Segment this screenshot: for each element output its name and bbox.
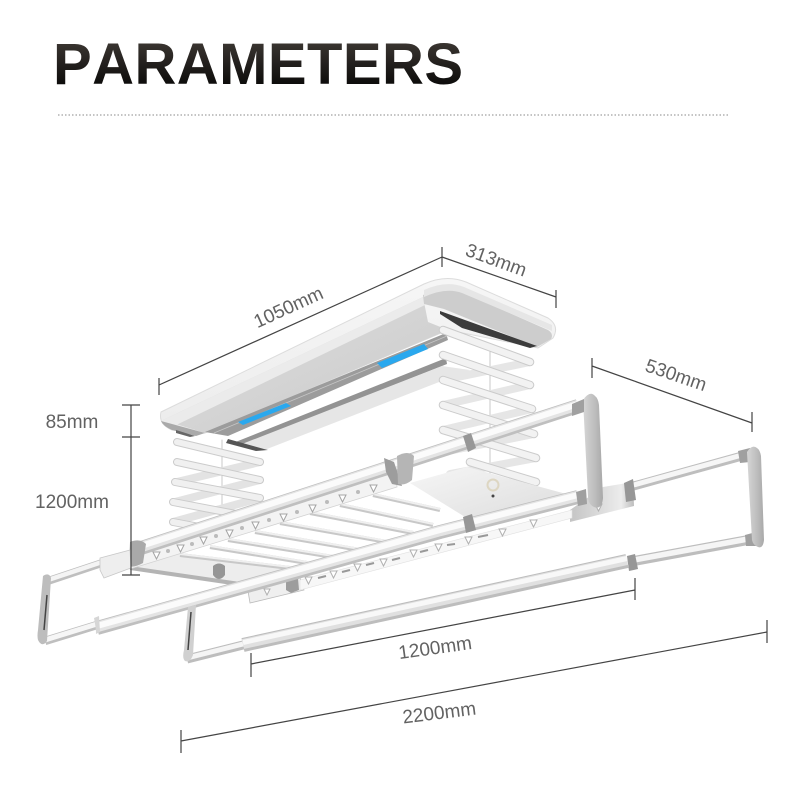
- dimension: 1050mm: 1050mm: [251, 283, 327, 333]
- rod bands: [627, 554, 638, 571]
- blue light left: [238, 403, 291, 425]
- rod band: [463, 433, 476, 452]
- right joints: [738, 448, 750, 463]
- lower-left handle: [183, 605, 196, 661]
- handle: [583, 394, 603, 508]
- ribbed strip 1: [205, 333, 448, 436]
- right joint: [576, 489, 587, 506]
- housing underside face: [163, 297, 448, 433]
- left tray plate: [130, 553, 290, 584]
- rack slats: [180, 495, 440, 568]
- dimension: 85mm and 1200mm height: [35, 405, 140, 575]
- dimension: 313mm: [442, 240, 556, 308]
- front perforated rail: [130, 462, 397, 569]
- dimension: 1050mm: [159, 247, 442, 395]
- hook bracket: [384, 458, 402, 486]
- front rod with right handle: [183, 447, 764, 661]
- title: PARAMETERS: [53, 32, 463, 97]
- blue light right: [377, 344, 428, 368]
- housing rim: [160, 278, 556, 433]
- left handle: [38, 574, 51, 644]
- right end block: [570, 482, 634, 522]
- right handle: [747, 447, 764, 547]
- lower perforated rail: [248, 482, 634, 603]
- drying tray with slats: [130, 467, 570, 585]
- dimension: 2200mm: [181, 620, 767, 753]
- rod band: [463, 514, 476, 533]
- left bracket: [129, 540, 146, 567]
- dimension: 530mm: 530mm: [642, 356, 709, 396]
- rear rod with grey handle: [129, 394, 603, 567]
- dimension: 530mm: [592, 356, 752, 432]
- inner panel: [242, 366, 470, 449]
- dimension: 1200mm width: 1200mm: [397, 633, 473, 664]
- clamp knob: [213, 564, 225, 579]
- end cap: [423, 290, 552, 347]
- top housing with blue lights: [160, 278, 556, 451]
- scissor lift: right: [443, 330, 536, 505]
- dimension: 313mm: 313mm: [463, 240, 529, 282]
- dimension: 1200mm width: [251, 578, 635, 677]
- dimension: 2200mm: 2200mm: [401, 699, 477, 728]
- dimension: 85mm and 1200mm height: 1200mm: [35, 492, 109, 513]
- dimension: 85mm and 1200mm height: 85mm: [46, 412, 98, 433]
- right tray panel: [410, 467, 570, 520]
- scissor lift: left: [173, 440, 260, 565]
- ribbed strip 2: [233, 358, 447, 444]
- middle rod with left handle: [38, 489, 587, 644]
